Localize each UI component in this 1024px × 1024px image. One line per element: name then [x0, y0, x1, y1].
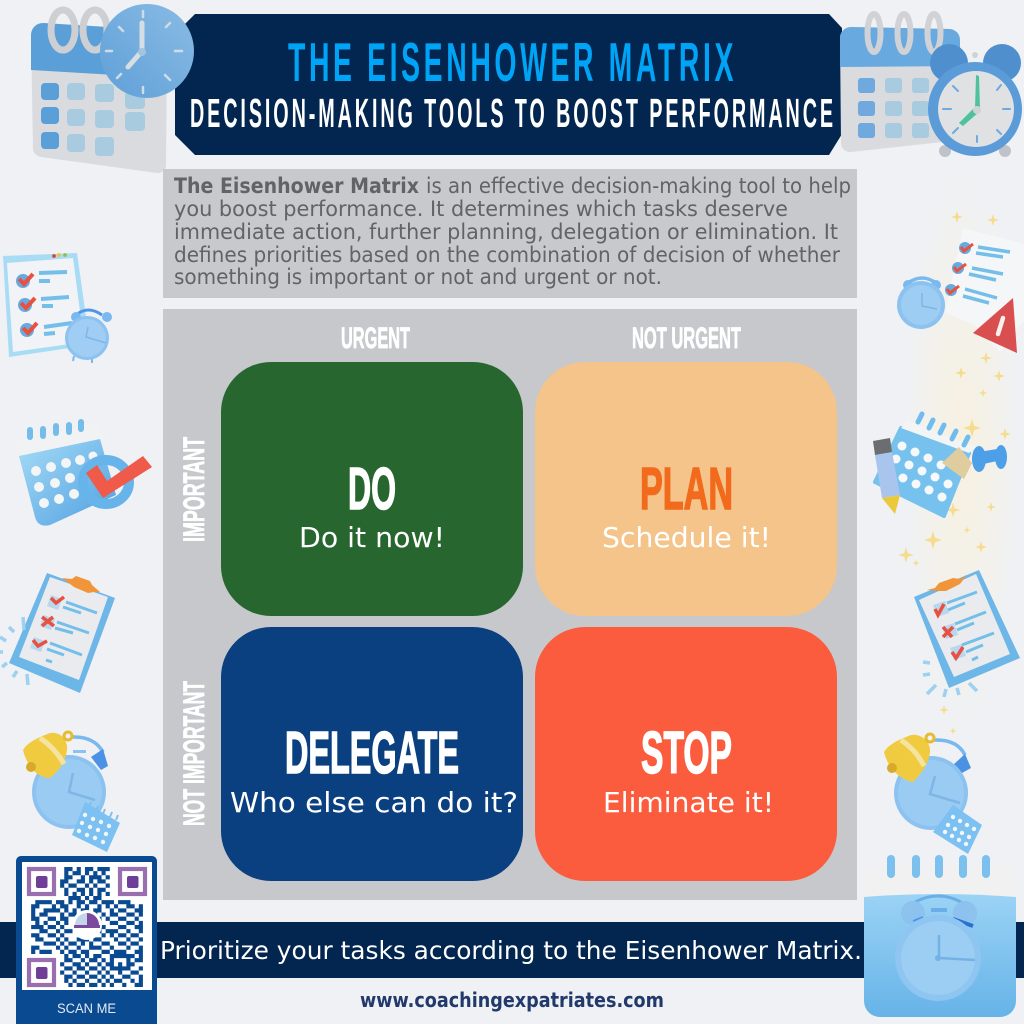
- icon: checklist with clock left: [3, 253, 112, 363]
- quadrant: stop: STOP: [641, 720, 732, 786]
- column label: urgent: URGENT: [341, 322, 410, 355]
- icon: calendar with clock top left: [31, 4, 194, 173]
- intro line 1: is an effective decision-making tool to help: [426, 174, 851, 199]
- intro line 4: defines priorities based on the combination of decision of whether: [174, 243, 840, 268]
- icon: bell and clock left: [23, 732, 120, 852]
- quadrant: delegate: [221, 627, 523, 881]
- icon: bell and clock right: [884, 734, 982, 854]
- icon: checklist, clock and warning right: [897, 228, 1024, 353]
- icon: calendar, pencil and pin right: [873, 414, 1007, 516]
- quadrant: delegate: Who else can do it?: [230, 786, 518, 819]
- quadrant: plan: [535, 362, 837, 616]
- title banner: [175, 14, 842, 155]
- quadrant: do: Do it now!: [299, 521, 445, 554]
- row label: not important: NOT IMPORTANT: [178, 681, 211, 826]
- footer tagline: Prioritize your tasks according to the Eisenhower Matrix.: [160, 936, 862, 965]
- icon: calendar with red check left: [16, 419, 152, 526]
- scan me caption: SCAN ME: [57, 1001, 116, 1016]
- row label: important: IMPORTANT: [178, 437, 211, 542]
- icon: large calendar with clock bottom right: [864, 855, 1016, 1017]
- intro line 3: immediate action, further planning, delegation or elimination. It: [174, 220, 838, 245]
- QR data modules: [31, 869, 143, 985]
- icon: clipboard right: [914, 570, 1020, 697]
- intro text panel: [163, 169, 857, 298]
- QR code card: [16, 856, 157, 1024]
- quadrant: plan: PLAN: [640, 456, 733, 522]
- QR finder patterns: [29, 869, 145, 985]
- icon: calendar with alarm clock top right: [840, 14, 1022, 157]
- matrix panel: [163, 309, 857, 900]
- website url: www.coachingexpatriates.com: [360, 988, 664, 1012]
- intro line 2: you boost performance. It determines which tasks deserve: [174, 197, 788, 222]
- quadrant: stop: [535, 627, 837, 881]
- intro line 5: something is important or not and urgent or not.: [174, 265, 662, 290]
- column label: not urgent: NOT URGENT: [632, 322, 741, 355]
- quadrant: do: DO: [348, 456, 396, 522]
- quadrant: plan: Schedule it!: [602, 521, 771, 554]
- icon: clipboard left: [0, 573, 115, 693]
- sparkle glow on right side: [898, 160, 1020, 740]
- quadrant: stop: Eliminate it!: [603, 786, 774, 819]
- quadrant: delegate: DELEGATE: [285, 720, 459, 786]
- quadrant: do: [221, 362, 523, 616]
- footer band: [0, 922, 1024, 978]
- intro bold lead: The Eisenhower Matrix: [174, 174, 419, 199]
- QR centre logo: [72, 910, 102, 940]
